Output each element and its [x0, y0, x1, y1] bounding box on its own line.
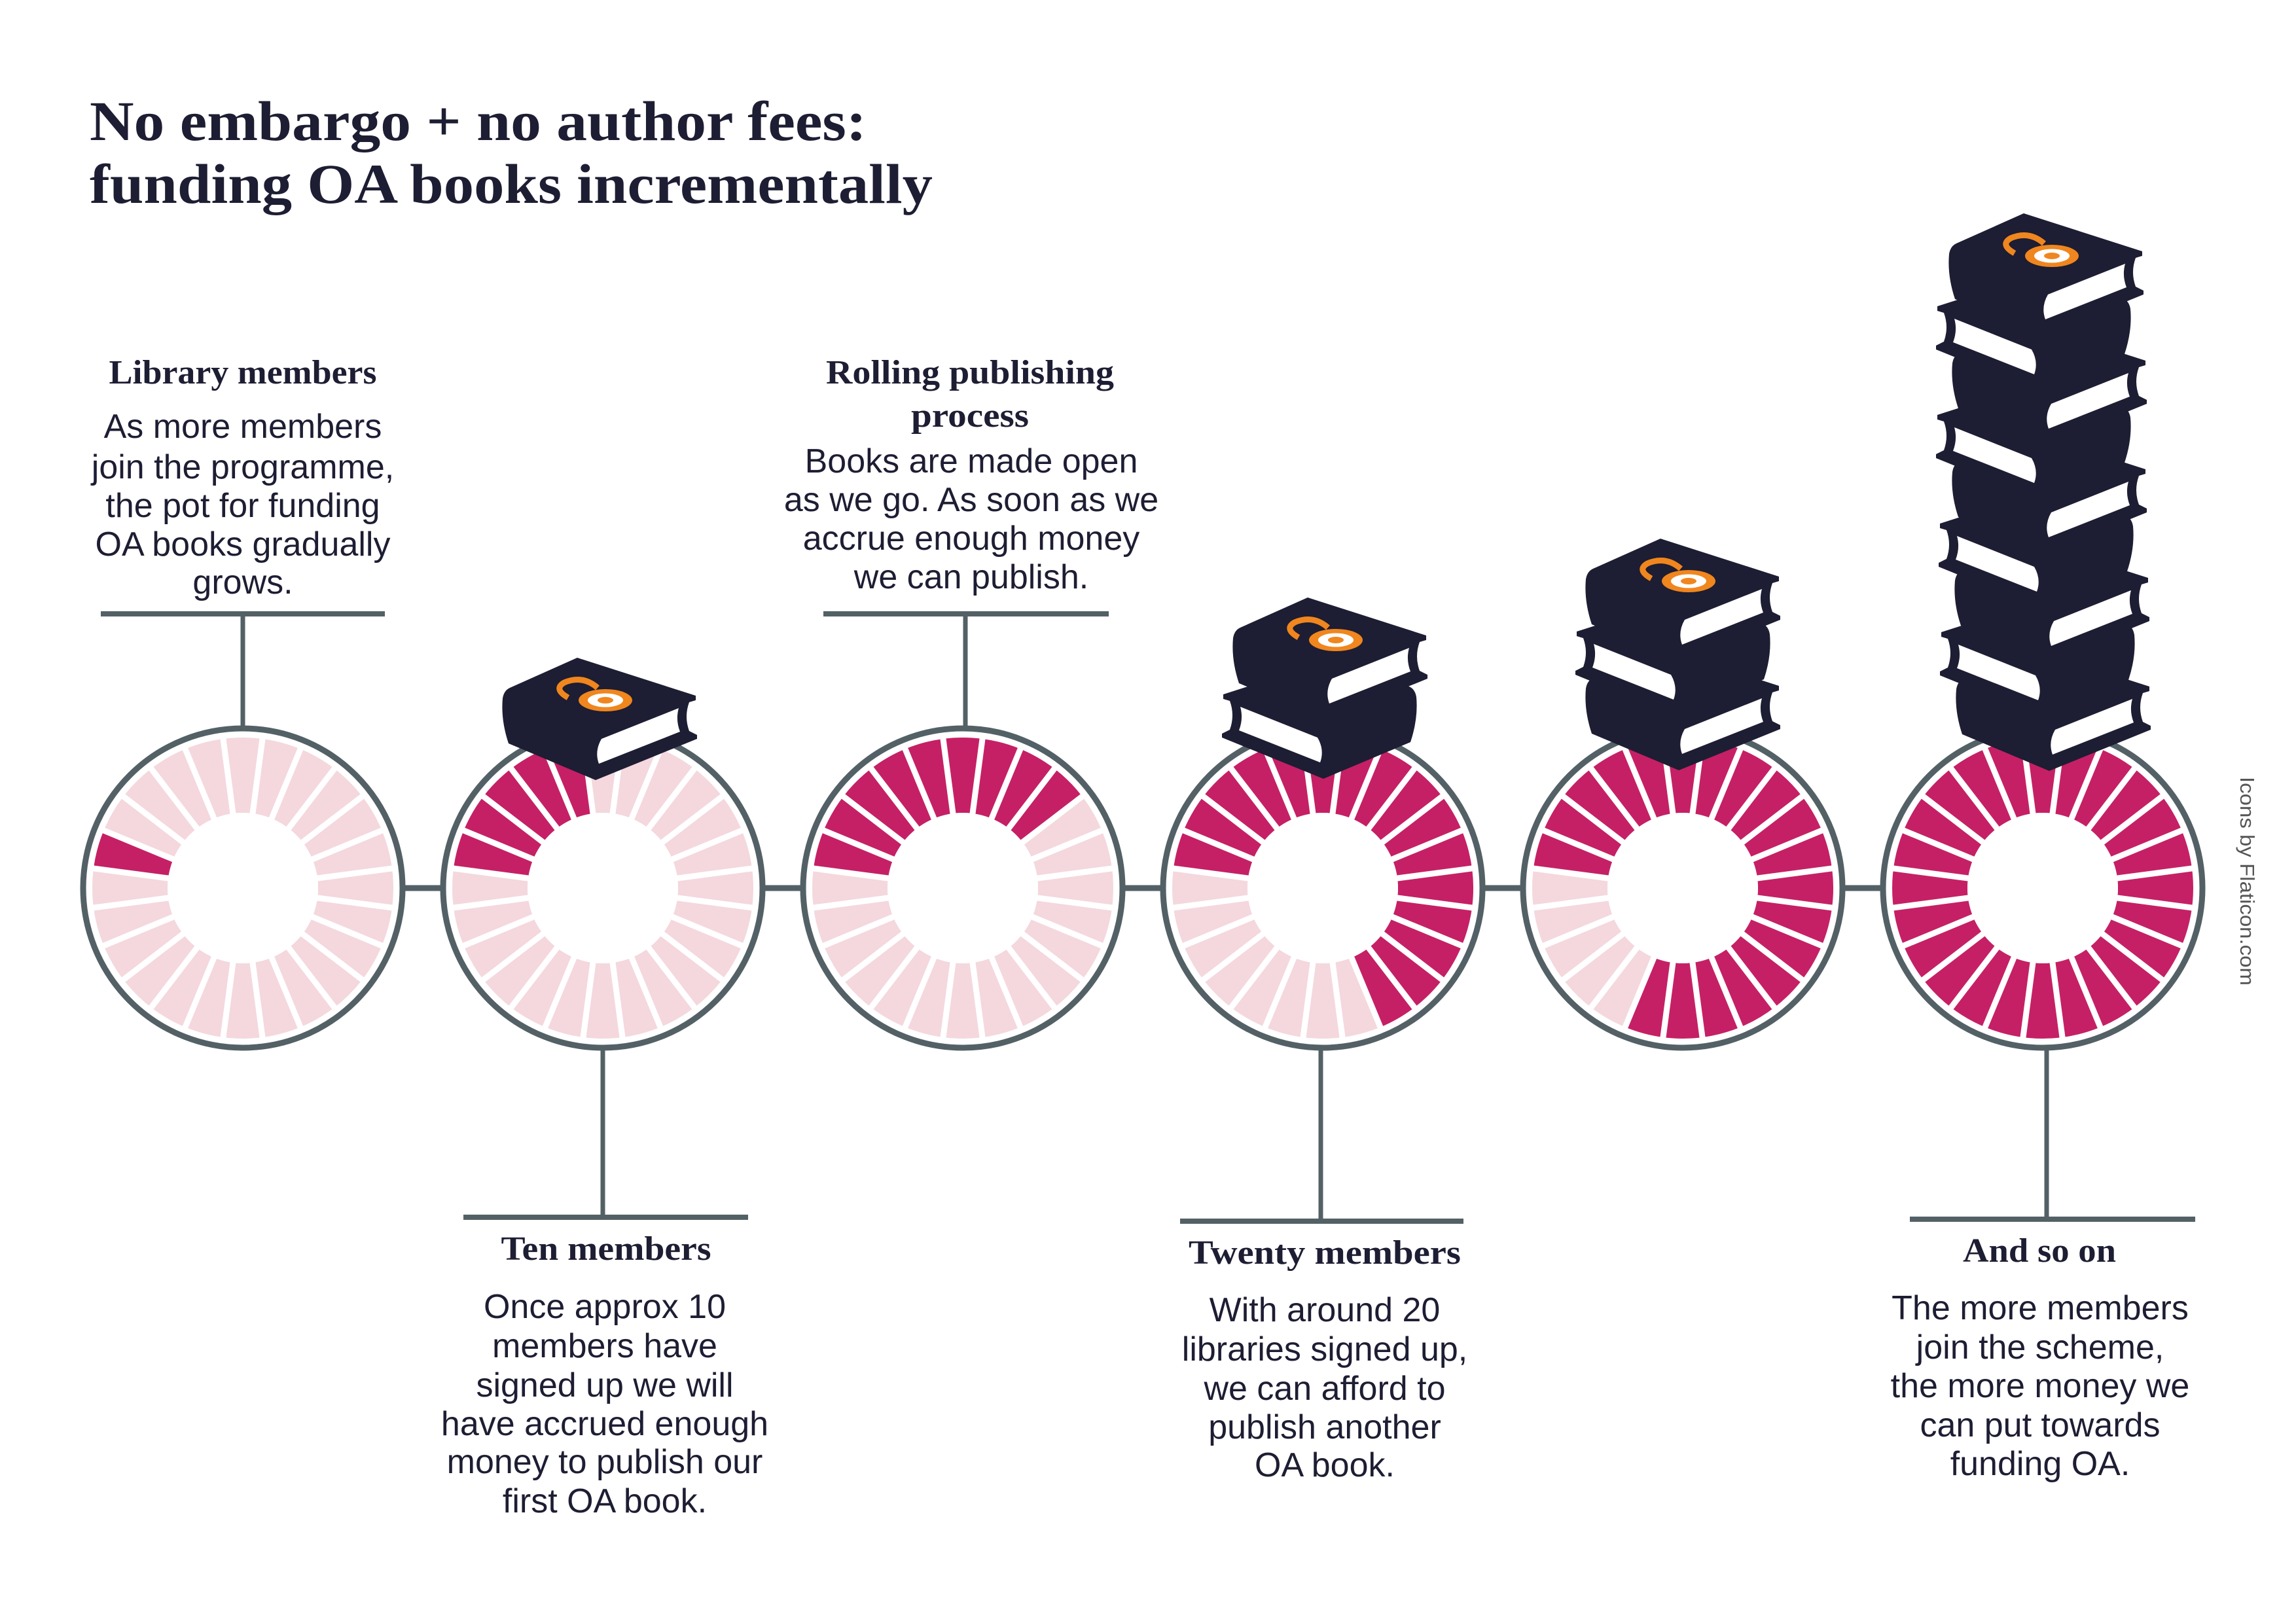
text block: and so on: funding OA.	[1950, 1445, 2130, 1483]
stem: and so on	[1910, 1050, 2195, 1219]
text block: and so on: The more members	[1892, 1289, 2189, 1327]
circle 3: nine segments	[803, 728, 1122, 1048]
text block: rolling publishing process: accrue enough money	[803, 520, 1139, 558]
text block: rolling publishing process	[784, 354, 1158, 596]
text block: and so on: the more money we	[1891, 1367, 2189, 1405]
text block: rolling publishing process: Rolling publishing	[826, 354, 1114, 391]
icon: single open access book	[502, 658, 697, 780]
text block: rolling publishing process: Books are made open	[805, 442, 1138, 480]
title: funding OA books incrementally	[90, 152, 933, 215]
text block: twenty members: OA book.	[1255, 1446, 1395, 1484]
circle 4: sixteen segments	[1163, 728, 1482, 1048]
text block: twenty members: publish another	[1208, 1408, 1441, 1446]
text block: and so on: can put towards	[1920, 1406, 2161, 1444]
text block: library members: grows.	[192, 563, 293, 601]
icon: stack of three books	[1575, 539, 1780, 770]
stem: library members	[101, 614, 385, 726]
text block: library members	[90, 354, 394, 601]
text block: ten members: first OA book.	[503, 1482, 707, 1520]
circle 2: five segments	[443, 728, 762, 1048]
stem: ten members	[463, 1050, 748, 1217]
text block: twenty members: we can afford to	[1203, 1370, 1446, 1408]
text block: twenty members	[1182, 1234, 1467, 1484]
circle 1: one segment	[83, 728, 403, 1048]
text block: rolling publishing process: process	[911, 397, 1029, 435]
stem: twenty members	[1180, 1050, 1463, 1221]
text block: library members: the pot for funding	[105, 487, 380, 525]
text block: twenty members: Twenty members	[1189, 1234, 1461, 1272]
text block: and so on: join the scheme,	[1915, 1329, 2164, 1366]
text block: ten members: members have	[492, 1327, 717, 1365]
circle 5: nineteen segments	[1523, 728, 1842, 1048]
credit: icons by flaticon: Icons by Flaticon.com	[2236, 777, 2259, 986]
stem: rolling publishing	[823, 614, 1109, 726]
text block: ten members: Once approx 10	[484, 1288, 726, 1326]
text block: ten members: signed up we will	[476, 1366, 734, 1404]
text block: twenty members: libraries signed up,	[1182, 1330, 1467, 1368]
text block: ten members: have accrued enough	[441, 1405, 768, 1443]
icon: tall stack of nine books	[1936, 213, 2151, 771]
text block: ten members	[441, 1230, 768, 1520]
icon: stack of two books	[1222, 597, 1427, 779]
text block: rolling publishing process: as we go. As soon as we	[784, 481, 1158, 519]
text block: ten members: money to publish our	[447, 1443, 762, 1481]
circle 6: full	[1883, 728, 2202, 1048]
text block: and so on: And so on	[1963, 1232, 2116, 1270]
title: No embargo + no author fees:	[90, 90, 867, 152]
text block: rolling publishing process: we can publish.	[853, 558, 1088, 596]
text block: library members: join the programme,	[90, 448, 394, 486]
text block: and so on	[1891, 1232, 2189, 1483]
title	[90, 90, 933, 215]
text block: library members: Library members	[109, 354, 377, 391]
text block: library members: OA books gradually	[96, 526, 390, 563]
text block: library members: As more members	[104, 408, 382, 446]
timeline connector line	[243, 885, 2043, 891]
text block: ten members: Ten members	[501, 1230, 711, 1268]
text block: twenty members: With around 20	[1210, 1291, 1440, 1329]
